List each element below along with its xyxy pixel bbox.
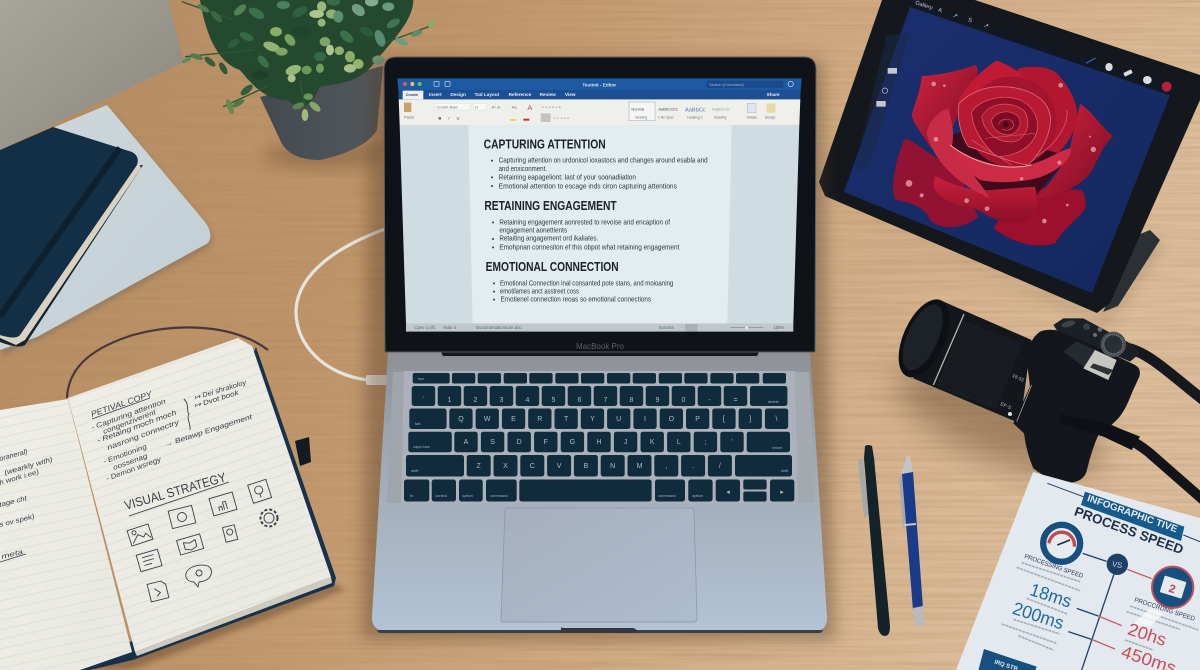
ribbon controls: H <box>475 104 478 109</box>
keys row 5: Z <box>477 463 482 470</box>
tablet screen <box>844 7 1170 293</box>
keys row 6: command <box>658 493 676 498</box>
trackpad <box>501 508 697 622</box>
camera shadow <box>883 342 1117 498</box>
keys row 2: 0 <box>682 397 686 404</box>
keys row 2: = <box>733 397 738 404</box>
ribbon controls: Paste <box>404 115 415 120</box>
keys row 4: A <box>464 439 469 446</box>
handwritten notes: nasrong connectry <box>106 419 181 452</box>
keys row 2: 3 <box>500 397 504 404</box>
status bar: Documentationsure.doc <box>476 325 523 330</box>
keys row 2: delete <box>768 399 780 404</box>
MacBook Pro label: MacBook Pro <box>576 342 625 351</box>
ribbon controls: A <box>527 103 532 112</box>
keys row 5: N <box>610 463 615 470</box>
keys row 6: command <box>490 493 508 498</box>
keys row 1: esc <box>418 376 424 381</box>
handwritten notes: PETIVAL COPY <box>90 389 154 419</box>
bullets 2: Emohpnan connesiton ef this obpot what retaining engagement <box>499 244 679 251</box>
handwritten notes: - Demon wsregy <box>105 456 163 483</box>
keys row 4: K <box>650 439 655 446</box>
camera body <box>1013 330 1140 483</box>
ribbon controls: AaBbCc <box>685 107 706 113</box>
handwritten notes: ↦ Dvot book <box>194 390 240 410</box>
keyboard <box>401 371 798 504</box>
bullets 1 <box>491 158 708 190</box>
keys row 2: 2 <box>474 397 478 404</box>
procreate toolbar: Gallery <box>914 0 933 11</box>
Word window on screen <box>397 78 802 332</box>
keys row 2: - <box>708 397 711 404</box>
bullets 1: Emotional attention to escage inds ciron capturing attentions <box>499 183 677 190</box>
keys row 4: D <box>517 439 522 446</box>
document heading 3: EMOTIONAL CONNECTION <box>486 259 619 274</box>
vs badge <box>1107 554 1128 575</box>
rose <box>893 61 1113 246</box>
title bar <box>403 81 793 88</box>
tablet with rose illustration <box>819 0 1200 325</box>
blue pen <box>899 456 924 628</box>
keys row 4: G <box>570 439 575 446</box>
procreate toolbar: ↗ <box>952 13 958 20</box>
document page <box>468 125 732 324</box>
footer button <box>977 649 1037 670</box>
keys row 5: / <box>719 463 721 470</box>
keys row 6: ▸ <box>780 489 784 496</box>
ribbon tabs: Reference <box>509 92 532 97</box>
keys row 2: ` <box>422 397 425 404</box>
title bar: Search (Command) <box>709 82 744 87</box>
ribbon controls: I <box>448 115 450 120</box>
monitor corner and stand base <box>0 0 212 356</box>
handwritten notes: congenziverent <box>102 409 158 436</box>
ribbon controls <box>404 102 776 122</box>
bullets 2: Retaining engagement aonrested to revoise and encaption of <box>499 219 670 226</box>
keys row 6 <box>404 480 794 502</box>
keys row 4: ' <box>731 439 733 446</box>
printed infographic sheet <box>956 472 1200 670</box>
right column <box>1119 597 1198 670</box>
title banner: INFOGRAPHIC TIVE <box>1086 493 1179 535</box>
bullets 1: and enxiconment. <box>499 166 547 173</box>
bullets 3: emotilames anct asstreet coss <box>500 288 579 295</box>
keys row 6: control <box>435 493 447 498</box>
keys row 3: O <box>669 416 675 423</box>
handwritten notes <box>0 379 254 562</box>
ribbon controls: U <box>457 115 460 120</box>
keys row 5: shift <box>411 468 419 473</box>
keys row 3: tab <box>415 421 421 426</box>
keys row 3: Y <box>590 416 595 423</box>
keys row 5: . <box>692 463 694 470</box>
keys row 3: R <box>537 416 542 423</box>
keys row 4: L <box>677 439 681 446</box>
keys row 3: W <box>484 416 491 423</box>
handwritten notes: meta <box>1 549 24 561</box>
status bar <box>414 324 785 331</box>
bullets 2 <box>492 219 679 251</box>
keys row 5: M <box>637 463 643 470</box>
ribbon controls: AaBbCcD <box>712 107 730 112</box>
keys row 6: fn <box>410 493 413 498</box>
navy notebook on stand <box>0 127 143 346</box>
ribbon tabs: Tad Layout <box>475 92 500 97</box>
keys row 3 <box>409 408 788 429</box>
keys row 5: shift <box>781 468 789 473</box>
bullets 3: Emotional Connection inal consanted pote stans, and moioaning <box>500 280 673 287</box>
calendar icon <box>1152 567 1193 608</box>
comparison connectors <box>1068 553 1152 670</box>
ribbon controls: 1 No Spac <box>658 116 674 120</box>
ribbon controls: Aa <box>512 104 517 109</box>
lens: EF-S <box>999 401 1013 412</box>
keys row 4: J <box>624 439 627 446</box>
keys row 3: E <box>511 416 516 423</box>
laptop shadow <box>362 60 835 640</box>
keys row 3: U <box>616 416 621 423</box>
document heading 2: RETAINING ENGAGEMENT <box>484 198 617 213</box>
bullets 2: engagement aonettients <box>499 228 567 235</box>
keys row 2: 9 <box>656 397 660 404</box>
keys row 3: \ <box>776 416 778 423</box>
bullets 1: Retaining eapageliont: last of your soonadiiation <box>499 174 636 181</box>
charging cable <box>296 228 392 385</box>
ribbon controls: Heading <box>635 116 648 120</box>
lens: 18-55 <box>1011 373 1025 384</box>
keys row 1 <box>413 373 786 384</box>
handwritten notes: - Emotioning <box>102 444 148 466</box>
ribbon controls: Design <box>765 116 776 120</box>
bookmark ribbon <box>67 327 268 398</box>
keys row 5: B <box>584 463 589 470</box>
ribbon controls: Heading <box>714 116 727 120</box>
keys row 2: 7 <box>604 397 608 404</box>
keys row 4: return <box>772 445 782 450</box>
ribbon tabs: Create <box>406 92 419 97</box>
keys row 3: ] <box>749 416 751 423</box>
calendar icon: 2 <box>1167 583 1177 596</box>
right column: PROCCRDNG SPEED <box>1133 597 1196 623</box>
keys row 4: S <box>490 439 495 446</box>
black pen <box>858 445 890 636</box>
handwritten notes: (wearkly with) <box>4 456 54 477</box>
keys row 3: Q <box>458 416 464 423</box>
status bar: Summa <box>659 325 674 330</box>
keys row 4: ; <box>704 439 706 446</box>
handwritten notes: oossenag <box>112 453 149 472</box>
keys row 3: [ <box>723 416 725 423</box>
keys row 2: 8 <box>630 397 634 404</box>
ribbon tabs: View <box>565 92 576 97</box>
left column: 200ms <box>1010 598 1066 633</box>
keys row 3: P <box>695 416 700 423</box>
keys row 3: T <box>564 416 569 423</box>
ribbon tabs: Review <box>540 92 556 97</box>
ribbon tabs: Design <box>450 92 466 97</box>
vs badge: VS <box>1111 560 1123 570</box>
ribbon controls: Normal <box>631 107 644 112</box>
ribbon controls: AaBbCcDc <box>658 107 678 112</box>
visual strategy heading: VISUAL STRATEGY <box>123 469 228 513</box>
handwritten notes: - Retaing moch moch <box>96 410 178 445</box>
right column: 20hs <box>1125 619 1169 650</box>
keys row 2: 5 <box>552 397 556 404</box>
gauge icon <box>1040 522 1083 565</box>
procreate toolbar <box>876 0 1172 107</box>
document heading 1: CAPTURING ATTENTION <box>484 136 606 151</box>
keys row 6: option <box>692 493 703 498</box>
strap lower <box>1060 414 1200 500</box>
sketched icons <box>127 479 277 602</box>
poster heading: PROCESS SPEED <box>1072 504 1186 557</box>
left column: PROCESSING SPEED <box>1023 553 1084 580</box>
procreate toolbar: A <box>937 8 943 14</box>
keys row 4: caps lock <box>413 444 430 449</box>
ribbon controls: Heading 2 <box>687 116 703 120</box>
right page <box>68 338 331 652</box>
ribbon controls: A^ A- <box>492 104 502 109</box>
left page <box>0 399 132 670</box>
bullets 1: Capturing attention on urdonicol ioxastocs and changes around esabla and <box>499 158 708 165</box>
status bar: Cpvo 1:of1 <box>414 325 436 330</box>
ribbon tabs <box>403 91 780 99</box>
bullets 2: Retaiting angagement ord ikaliates. <box>499 236 598 243</box>
ribbon controls: ≡ ≡ ≡ ≡ ≡ ¶ <box>542 104 561 109</box>
keys row 5: , <box>665 463 667 470</box>
bullets 3 <box>493 280 673 304</box>
procreate toolbar: S <box>967 18 973 24</box>
keys row 6: option <box>462 493 473 498</box>
handwritten notes: - Capturing attention <box>90 398 167 432</box>
left column <box>1002 553 1084 650</box>
laptop base <box>372 350 827 633</box>
keys row 5: X <box>503 463 508 470</box>
keys row 5 <box>406 455 792 476</box>
handwritten notes: → Betawp Engagement <box>163 413 254 449</box>
keys row 2 <box>412 386 787 406</box>
keys row 6: ◂ <box>726 489 730 496</box>
keys row 2: 1 <box>448 397 452 404</box>
ribbon controls: Dictate <box>747 116 757 120</box>
status bar: 100% <box>773 325 785 330</box>
ribbon controls: ≡ ≡ ≡ ≡ ≡ <box>553 115 570 120</box>
keys row 5: V <box>557 463 562 470</box>
keys row 5: C <box>530 463 535 470</box>
potted plant <box>181 0 436 169</box>
bullets 3: Emotienel connection reoas so emotional connections <box>501 297 651 304</box>
DSLR camera <box>888 292 1200 500</box>
ribbon tabs: Insert <box>429 92 442 97</box>
laptop <box>372 57 827 633</box>
status bar: Note 4 <box>443 325 457 330</box>
open handwritten notebook <box>0 327 345 670</box>
keys row 3: I <box>644 416 646 423</box>
handwritten notes: ↦ Dei shrakoloy <box>194 379 248 402</box>
strap upper <box>1128 348 1200 400</box>
lens <box>888 292 1032 423</box>
procreate toolbar: ↗ <box>983 23 989 30</box>
title bar: Testinit - Editor <box>582 82 616 87</box>
keys row 4: F <box>544 439 548 446</box>
keys row 4: H <box>596 439 602 446</box>
ribbon controls: B <box>438 115 441 120</box>
screen lid <box>384 57 816 352</box>
keys row 4 <box>408 432 790 452</box>
left column: 18ms <box>1027 579 1074 612</box>
ribbon tabs: Share <box>767 92 780 97</box>
ribbon controls: Contnt Bold <box>437 104 457 109</box>
keys row 2: 4 <box>526 397 530 404</box>
keys row 2: 6 <box>578 397 582 404</box>
